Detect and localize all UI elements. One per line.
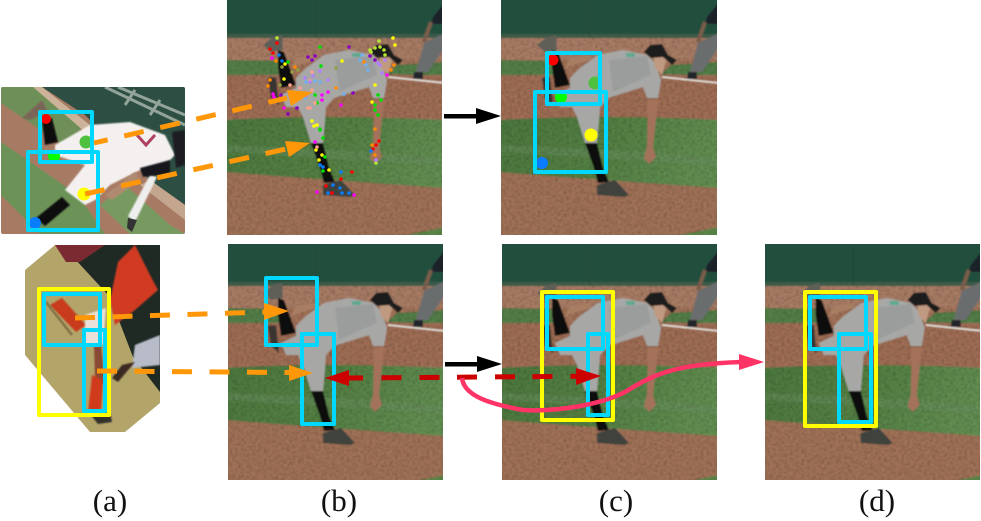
boxes: (c) bottom yellow and cyan: [542, 292, 613, 420]
arrow: orange dashed top 2: [85, 141, 310, 194]
dots: (a) top keypoints: [29, 114, 92, 229]
boxes: (a) bottom yellow and cyan: [39, 289, 109, 415]
label: (c): (c): [599, 483, 633, 518]
panel: (c) top photo with boxes: [501, 0, 717, 235]
label: (b): (b): [321, 483, 357, 518]
label: (d): (d): [859, 483, 895, 518]
boxes: (b) bottom parts: [266, 278, 334, 424]
arrow: pink curved to (d): [462, 354, 764, 410]
boxes: (c) top parts: [535, 53, 606, 172]
dots: (b) transferred keypoints: [268, 38, 395, 195]
panel: (a) top rotated crop: [1, 87, 185, 234]
boxes: (d) result yellow and cyan: [805, 292, 876, 426]
panel: (b) bottom photo: [228, 244, 443, 480]
dots: (c) top keypoints: [536, 54, 602, 169]
arrow: orange dashed top 1: [94, 90, 313, 143]
panel: (d) result photo: [765, 244, 980, 480]
arrow: black (b) to (c) bottom: [445, 356, 502, 372]
arrow: dark red double-headed dashed: [325, 368, 601, 386]
arrow: black (b) to (c) top: [444, 108, 501, 124]
panel: (c) bottom photo: [502, 244, 717, 480]
panel: (a) bottom rotated crop: [25, 245, 160, 432]
label: (a): (a): [93, 483, 127, 518]
boxes: (a) top parts: [28, 112, 98, 230]
arrow: orange dashed bottom 1: [75, 303, 289, 320]
panel: (b) top photo with keypoints: [227, 0, 442, 235]
arrow: orange dashed bottom 2: [97, 365, 313, 381]
